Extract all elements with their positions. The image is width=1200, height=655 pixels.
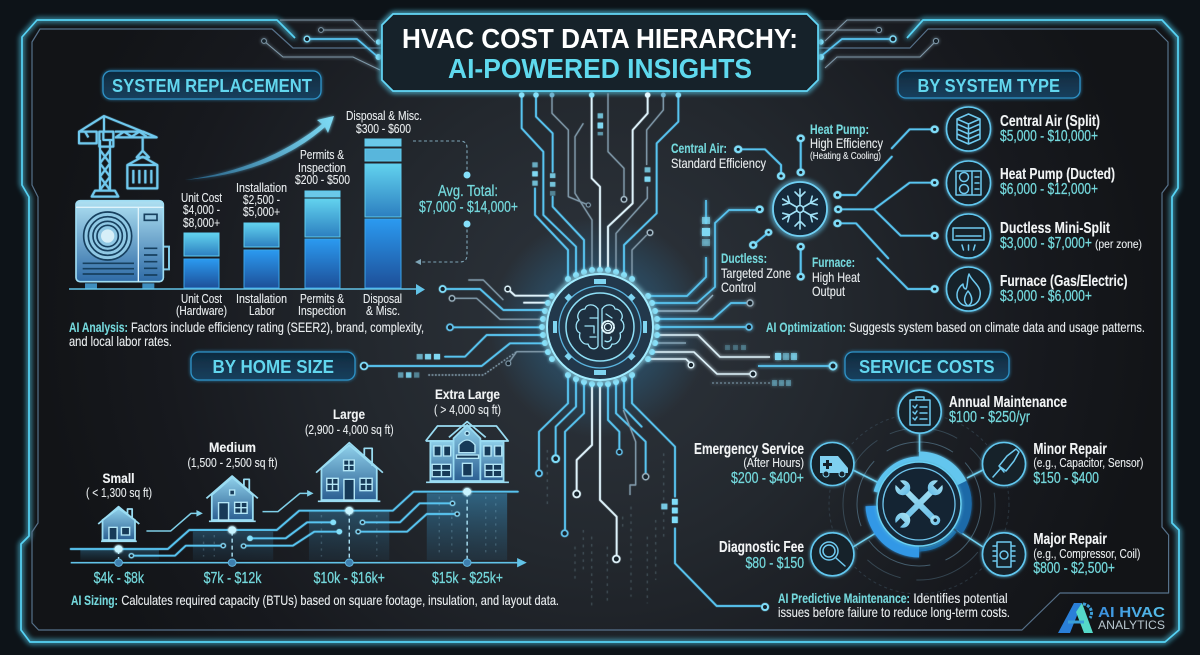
bar value labels: Disposal & Misc. — [346, 108, 422, 123]
bar value labels: $8,000+ — [183, 215, 220, 230]
hub labels: Central Air: — [671, 140, 727, 156]
faint rings — [829, 414, 1009, 594]
note: AI predictive maintenance: Identifies potential — [913, 590, 1008, 606]
bar category labels: (Hardware) — [176, 303, 227, 318]
item: major repair: (e.g., Compressor, Coil) — [1033, 546, 1140, 561]
bar value labels: Permits & — [300, 147, 344, 162]
item: annual maintenance — [898, 390, 1067, 433]
circuit traces to title — [262, 20, 939, 70]
axis — [71, 560, 519, 565]
icon: outdoor AC unit — [76, 201, 169, 289]
panel: by system type — [671, 71, 1145, 335]
home size labels: ( < 1,300 sq ft) — [86, 485, 152, 500]
bar value labels: Inspection — [298, 160, 346, 175]
title line 1: HVAC COST DATA HIERARCHY: — [402, 23, 798, 54]
icon: flame — [946, 267, 990, 311]
item: emergency service: Emergency Service — [694, 441, 804, 458]
bright nodes — [115, 488, 471, 553]
item: major repair — [982, 531, 1140, 577]
item: heat pump — [946, 161, 1115, 205]
note: AI optimization: AI Optimization: — [766, 319, 846, 335]
icon: wall unit — [946, 214, 990, 258]
hub labels: Output — [812, 283, 845, 299]
growth arrow — [185, 116, 334, 180]
dashed drops — [119, 493, 467, 562]
note: AI predictive maintenance: AI Predictive Maintenance: — [778, 590, 910, 606]
step arrows — [146, 493, 311, 531]
home size labels: Extra Large — [435, 386, 500, 402]
radial hub — [829, 414, 1009, 594]
note: AI analysis: and local labor rates. — [69, 333, 172, 349]
heading: system replacement — [103, 71, 321, 99]
note: AI sizing: AI Sizing: — [71, 592, 118, 608]
title banner — [382, 14, 818, 91]
item: furnace: $3,000 - $6,000+ — [1000, 288, 1092, 305]
item: heat pump: Heat Pump (Ducted) — [1000, 166, 1115, 183]
logo: AI HVAC Analytics: AI HVAC — [1098, 605, 1166, 621]
panel: system replacement — [69, 71, 518, 349]
bar value labels: $300 - $600 — [356, 121, 411, 136]
icon: crossed wrenches — [891, 476, 947, 532]
home size labels: Medium — [209, 439, 256, 455]
item: minor repair: (e.g., Capacitor, Sensor) — [1033, 455, 1143, 470]
item: ductless mini-split: Ductless Mini-Split — [1000, 220, 1110, 237]
item: major repair: $800 - $2,500+ — [1033, 560, 1115, 577]
logo: AI HVAC Analytics: ANALYTICS — [1098, 618, 1165, 632]
heading: by home size — [191, 352, 355, 380]
hub labels: (Heating & Cooling) — [810, 151, 881, 162]
item: furnace: Furnace (Gas/Electric) — [1000, 273, 1128, 290]
average total: Avg. Total: — [438, 183, 498, 200]
title line 2: AI-POWERED INSIGHTS — [448, 53, 752, 84]
central AI chip — [539, 267, 660, 387]
staircase chart — [71, 422, 527, 567]
panel: by home size — [71, 352, 559, 608]
icon: small house — [98, 507, 139, 541]
note: AI sizing: Calculates required capacity (BTUs) based on square footage, insulation, and layout data. — [121, 592, 559, 608]
item: emergency service — [694, 441, 854, 487]
note: AI predictive maintenance — [778, 590, 1010, 620]
central circuit traces: right — [648, 200, 836, 386]
home size labels — [86, 386, 501, 500]
icon: multimeter probe — [982, 442, 1026, 486]
digit rain — [204, 497, 496, 557]
item: furnace — [946, 267, 1128, 311]
icon: clipboard — [898, 390, 941, 433]
heading: by home size: BY HOME SIZE — [212, 356, 334, 377]
icon: magnifier — [811, 533, 854, 576]
icon: medium house — [206, 476, 258, 521]
central circuit traces: top — [519, 92, 681, 279]
icon: heat pump — [946, 161, 990, 205]
bar value labels: Unit Cost — [181, 190, 222, 205]
data columns — [80, 493, 507, 560]
icon: construction crane — [79, 116, 157, 197]
item: minor repair: Minor Repair — [1033, 441, 1107, 458]
item: annual maintenance: Annual Maintenance — [949, 394, 1067, 411]
item: central air: $5,000 - $10,000+ — [1000, 128, 1098, 145]
connector network — [735, 127, 937, 292]
home size labels: ( > 4,000 sq ft) — [434, 402, 501, 417]
note: AI analysis — [69, 319, 424, 349]
heading: by system type: BY SYSTEM TYPE — [918, 75, 1060, 96]
hub labels: Heat Pump: — [810, 121, 869, 137]
note: AI optimization — [766, 319, 1145, 335]
bar value labels: $2,500 - — [243, 192, 280, 207]
hub labels: Control — [721, 279, 756, 295]
icon: large house — [316, 443, 383, 501]
heading: system replacement: SYSTEM REPLACEMENT — [112, 75, 313, 96]
main stepped line — [71, 492, 518, 549]
bar value labels: $4,000 - — [183, 202, 220, 217]
item: ductless mini-split: $3,000 - $7,000+ — [1000, 235, 1092, 252]
central glow — [490, 217, 710, 437]
item: central air — [946, 107, 1100, 151]
bar category labels: Installation — [236, 291, 287, 306]
bar category labels: & Misc. — [366, 303, 400, 318]
home size prices: $7k - $12k — [204, 570, 262, 587]
connectors — [853, 433, 983, 547]
item: heat pump: $6,000 - $12,000+ — [1000, 181, 1098, 198]
chip pins — [539, 267, 660, 387]
bar category labels: Unit Cost — [181, 291, 222, 306]
hub labels: High Heat — [812, 269, 860, 285]
home size labels: Small — [102, 470, 134, 486]
hub labels: Targeted Zone — [721, 265, 791, 281]
item: diagnostic fee: $80 - $150 — [746, 555, 804, 572]
hub labels: Standard Efficiency — [671, 155, 766, 171]
data chips — [532, 113, 650, 196]
note: AI predictive maintenance: issues before failure to reduce long-term costs. — [778, 604, 1010, 620]
hub labels: Furnace: — [812, 254, 855, 270]
bar value labels — [181, 108, 422, 230]
item: ductless mini-split — [946, 214, 1142, 258]
icon: compressor board — [982, 533, 1026, 576]
item: minor repair: $150 - $400 — [1033, 470, 1099, 487]
note: AI analysis: AI Analysis: — [69, 319, 128, 335]
average total — [419, 183, 518, 216]
chip rings — [547, 274, 653, 380]
bar category labels: Labor — [249, 303, 276, 318]
secondary lines — [129, 501, 459, 558]
item: major repair: Major Repair — [1033, 531, 1107, 548]
icon: brain with gear — [576, 305, 624, 349]
note: AI analysis: Factors include efficiency rating (SEER2), brand, complexity, — [131, 319, 424, 335]
icon: extra large house — [426, 422, 509, 482]
heading: by system type — [898, 71, 1080, 98]
bar category labels: Disposal — [363, 291, 402, 306]
heading: service costs: SERVICE COSTS — [859, 356, 994, 377]
logo: AI HVAC Analytics — [1058, 603, 1166, 633]
item: diagnostic fee — [719, 533, 854, 576]
binary data rain — [547, 450, 664, 610]
home size labels: (1,500 - 2,500 sq ft) — [188, 455, 278, 470]
bar category labels: Inspection — [298, 303, 346, 318]
home size prices — [94, 570, 503, 587]
panel: service costs — [694, 352, 1143, 620]
bar value labels: $200 - $500 — [295, 172, 350, 187]
central circuit traces: bottom — [536, 375, 768, 610]
hub labels: High Efficiency — [810, 135, 883, 151]
home size labels: Large — [333, 406, 365, 422]
home size prices: $10k - $16k+ — [314, 570, 385, 587]
segmented ring — [871, 456, 967, 552]
hub labels — [671, 121, 883, 299]
bar category labels: Permits & — [300, 291, 344, 306]
icon: ambulance — [811, 442, 854, 486]
item: emergency service: $200 - $400+ — [731, 470, 804, 487]
item: minor repair — [982, 441, 1143, 487]
bars — [184, 139, 401, 288]
item: annual maintenance: $100 - $250/yr — [949, 409, 1030, 426]
icon: snowflake hub — [773, 182, 827, 236]
bar value labels: $5,000+ — [243, 204, 280, 219]
heading: service costs — [845, 352, 1009, 380]
bar chart: replacement costs — [69, 108, 425, 318]
item: diagnostic fee: Diagnostic Fee — [719, 539, 804, 556]
bracket arrow: average total — [413, 141, 470, 265]
home size labels: (2,900 - 4,000 sq ft) — [305, 422, 394, 437]
item: ductless mini-split: (per zone) — [1095, 237, 1142, 251]
icon: logo mark — [1058, 603, 1093, 633]
home size prices: $15k - $25k+ — [432, 570, 503, 587]
bar category labels — [176, 291, 402, 318]
item: emergency service: (After Hours) — [743, 455, 804, 470]
bar value labels: Installation — [236, 180, 287, 195]
axis — [69, 288, 418, 290]
item: central air: Central Air (Split) — [1000, 113, 1100, 130]
icon: condenser — [946, 107, 990, 151]
hub labels: Ductless: — [721, 250, 767, 266]
home size prices: $4k - $8k — [94, 570, 144, 587]
average total: $7,000 - $14,000+ — [419, 199, 518, 216]
central circuit traces: left — [361, 280, 552, 378]
